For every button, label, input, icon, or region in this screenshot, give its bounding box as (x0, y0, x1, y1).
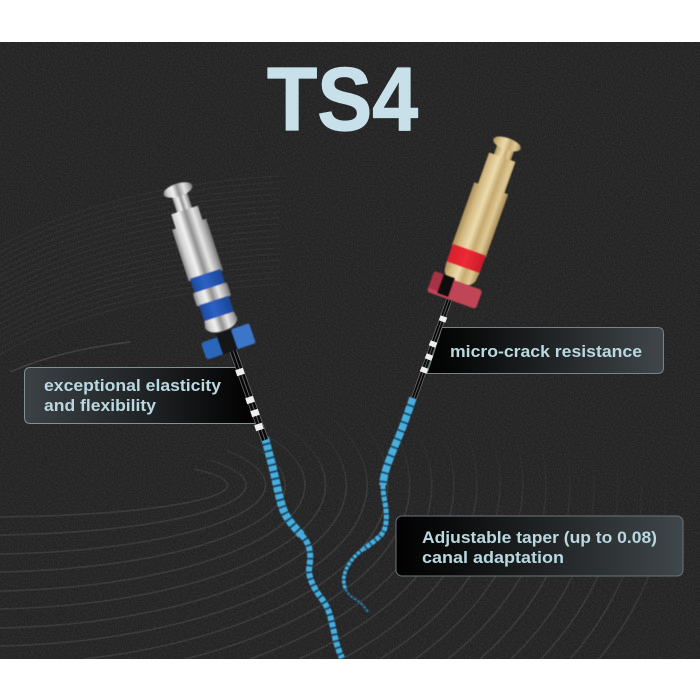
right file: blue flexible tip (344, 398, 413, 612)
right file: black shaft with depth marks (414, 300, 449, 398)
callout card: elasticity: exceptional elasticity (44, 377, 222, 395)
right file: red stopper (427, 271, 483, 309)
right file: gold handle with red band (440, 132, 526, 291)
callout card: micro-crack: micro-crack resistance (450, 343, 642, 361)
title: TS4 (267, 50, 418, 150)
callout card: adjustable taper (396, 516, 683, 576)
left file: blue stopper (200, 323, 256, 360)
left file: blue flexible tip (265, 438, 342, 658)
callout card: adjustable taper: Adjustable taper (up to 0.08) (422, 529, 657, 547)
left file: black shaft with depth marks (231, 345, 265, 440)
callout card: elasticity (24, 368, 257, 424)
callout card: micro-crack (427, 328, 664, 374)
left file: silver handle with blue bands (159, 178, 241, 336)
callout card: adjustable taper: canal adaptation (422, 549, 564, 567)
callout card: elasticity: and flexibility (44, 397, 157, 415)
